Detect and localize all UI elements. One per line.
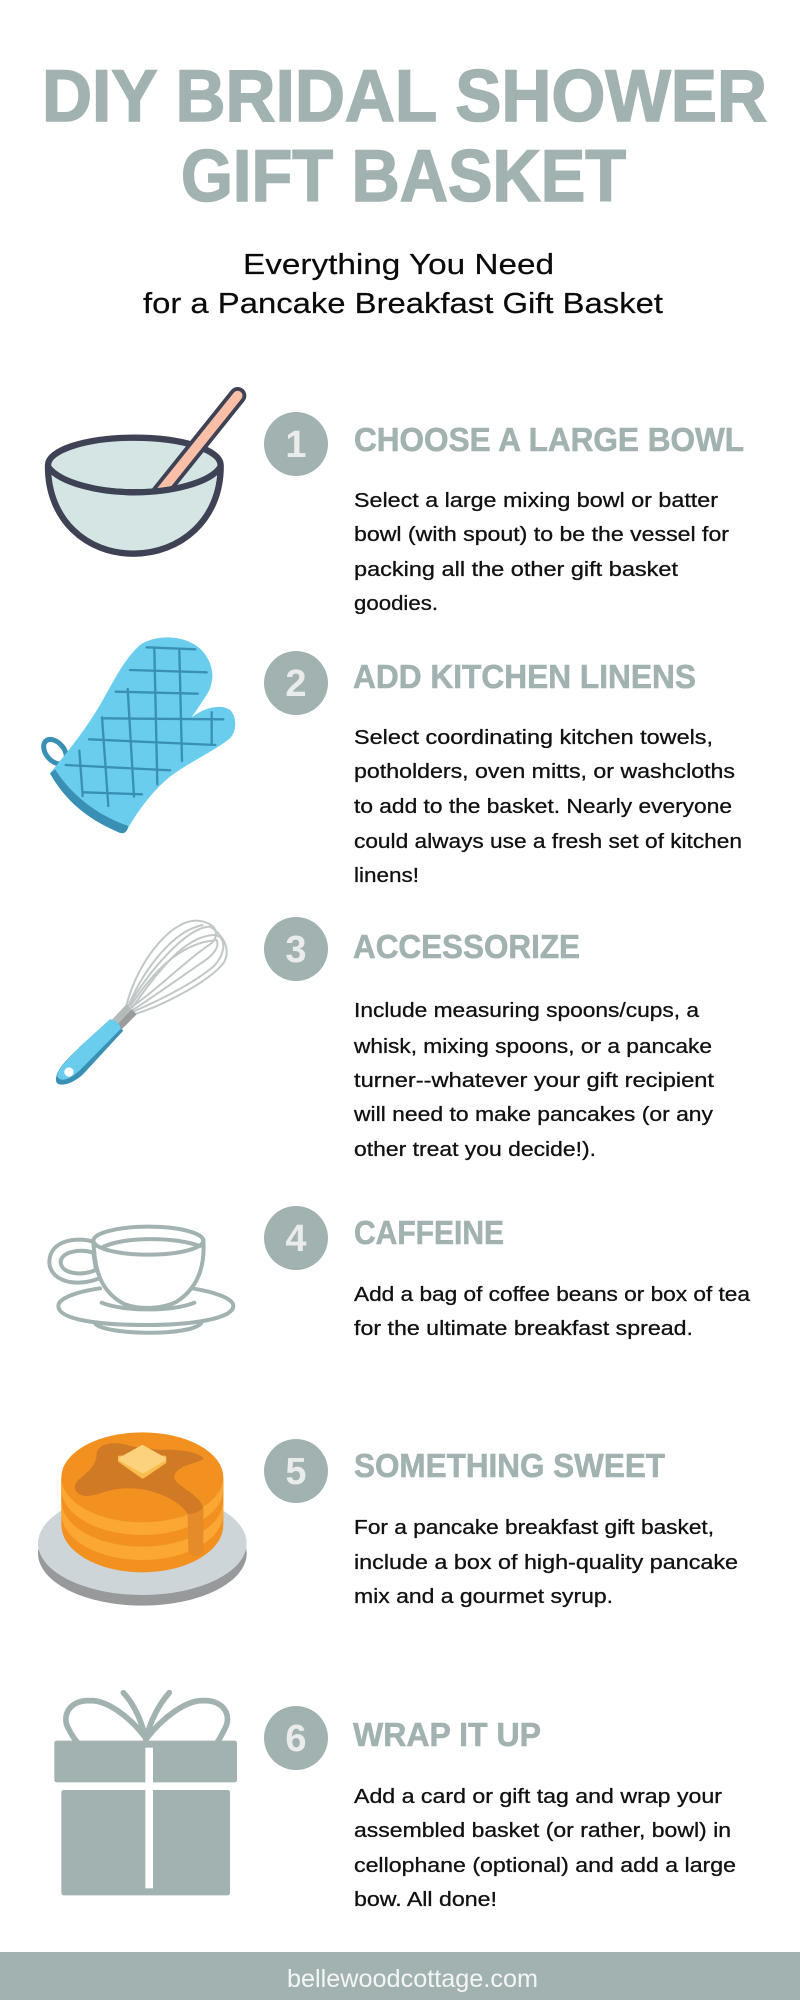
text block: step 3: other treat you decide!). [354, 1139, 596, 1161]
number badge 4 [264, 1206, 328, 1270]
text block: step 4: Add a bag of coffee beans or box of tea [354, 1284, 751, 1306]
number badge 5: 5 [285, 1451, 307, 1493]
subtitle [143, 249, 663, 320]
icon: pancake stack on plate [38, 1432, 247, 1606]
number badge 2 [264, 651, 328, 715]
subtitle: Everything You Need [243, 249, 554, 281]
text block: step 5: include a box of high-quality pancake [354, 1552, 738, 1574]
panel: step 6 wrap it up [54, 1693, 736, 1911]
text block: step 5: For a pancake breakfast gift basket, [354, 1517, 714, 1539]
heading: accessorize: ACCESSORIZE [353, 928, 580, 965]
footer bar: bellewoodcottage.com [287, 1965, 538, 1993]
title: DIY BRIDAL SHOWER [42, 56, 767, 137]
text block: step 1: bowl (with spout) to be the vessel for [354, 524, 729, 546]
icon: gift box with bow [54, 1693, 237, 1895]
text block: step 2: to add to the basket. Nearly everyone [354, 796, 732, 818]
number badge 1: 1 [285, 424, 307, 466]
number badge 4: 4 [285, 1218, 307, 1260]
text block: step 1: Select a large mixing bowl or batter [354, 490, 718, 512]
title: GIFT BASKET [181, 136, 626, 217]
text block: step 6: assembled basket (or rather, bowl) in [354, 1820, 731, 1842]
number badge 3: 3 [285, 929, 307, 971]
text block: step 6: cellophane (optional) and add a large [354, 1855, 736, 1877]
text block: step 5: mix and a gourmet syrup. [354, 1586, 613, 1608]
text block: step 2: could always use a fresh set of kitchen [354, 831, 742, 853]
icon: oven mitt [39, 637, 235, 833]
text block: step 3: Include measuring spoons/cups, a [354, 1000, 700, 1022]
text block: step 3: whisk, mixing spoons, or a pancake [353, 1036, 712, 1058]
text block: step 2 [354, 727, 742, 887]
text block: step 5 [354, 1517, 738, 1608]
text block: step 1: goodies. [354, 593, 438, 615]
text block: step 1: packing all the other gift basket [354, 559, 679, 581]
icon: mixing bowl with spoon [48, 396, 238, 554]
heading: wrap it up: WRAP IT UP [353, 1716, 541, 1753]
panel: step 1 choose a large bowl [48, 396, 744, 615]
text block: step 1 [354, 490, 729, 615]
heading: something sweet: SOMETHING SWEET [354, 1447, 665, 1484]
text block: step 2: potholders, oven mitts, or washcloths [354, 761, 735, 783]
subtitle: for a Pancake Breakfast Gift Basket [143, 288, 663, 320]
panel: step 2 add kitchen linens [39, 637, 742, 887]
text block: step 3 [353, 1000, 715, 1161]
heading: add kitchen linens: ADD KITCHEN LINENS [353, 658, 696, 695]
text block: step 6: Add a card or gift tag and wrap your [354, 1786, 722, 1808]
number badge 3 [264, 917, 328, 981]
panel: step 5 something sweet [38, 1432, 738, 1608]
text block: step 4: for the ultimate breakfast spread. [354, 1318, 693, 1340]
text block: step 6: bow. All done! [354, 1889, 497, 1911]
icon: coffee cup on saucer [49, 1227, 233, 1333]
text block: step 3: turner--whatever your gift recipient [354, 1070, 715, 1092]
text block: step 6 [354, 1786, 736, 1911]
number badge 1 [264, 412, 328, 476]
text block: step 3: will need to make pancakes (or any [353, 1104, 713, 1126]
text block: step 4 [354, 1284, 751, 1340]
footer bar [0, 1952, 800, 2000]
number badge 6 [264, 1706, 328, 1770]
heading: choose a large bowl: CHOOSE A LARGE BOWL [354, 421, 744, 458]
text block: step 2: linens! [354, 865, 419, 887]
number badge 2: 2 [285, 663, 307, 705]
number badge 5 [264, 1439, 328, 1503]
panel: step 4 caffeine [49, 1206, 751, 1340]
panel: step 3 accessorize [56, 917, 715, 1161]
text block: step 2: Select coordinating kitchen towels, [354, 727, 713, 749]
heading: caffeine: CAFFEINE [354, 1214, 504, 1251]
icon: whisk [56, 921, 227, 1085]
title [42, 56, 767, 217]
number badge 6: 6 [285, 1718, 307, 1760]
